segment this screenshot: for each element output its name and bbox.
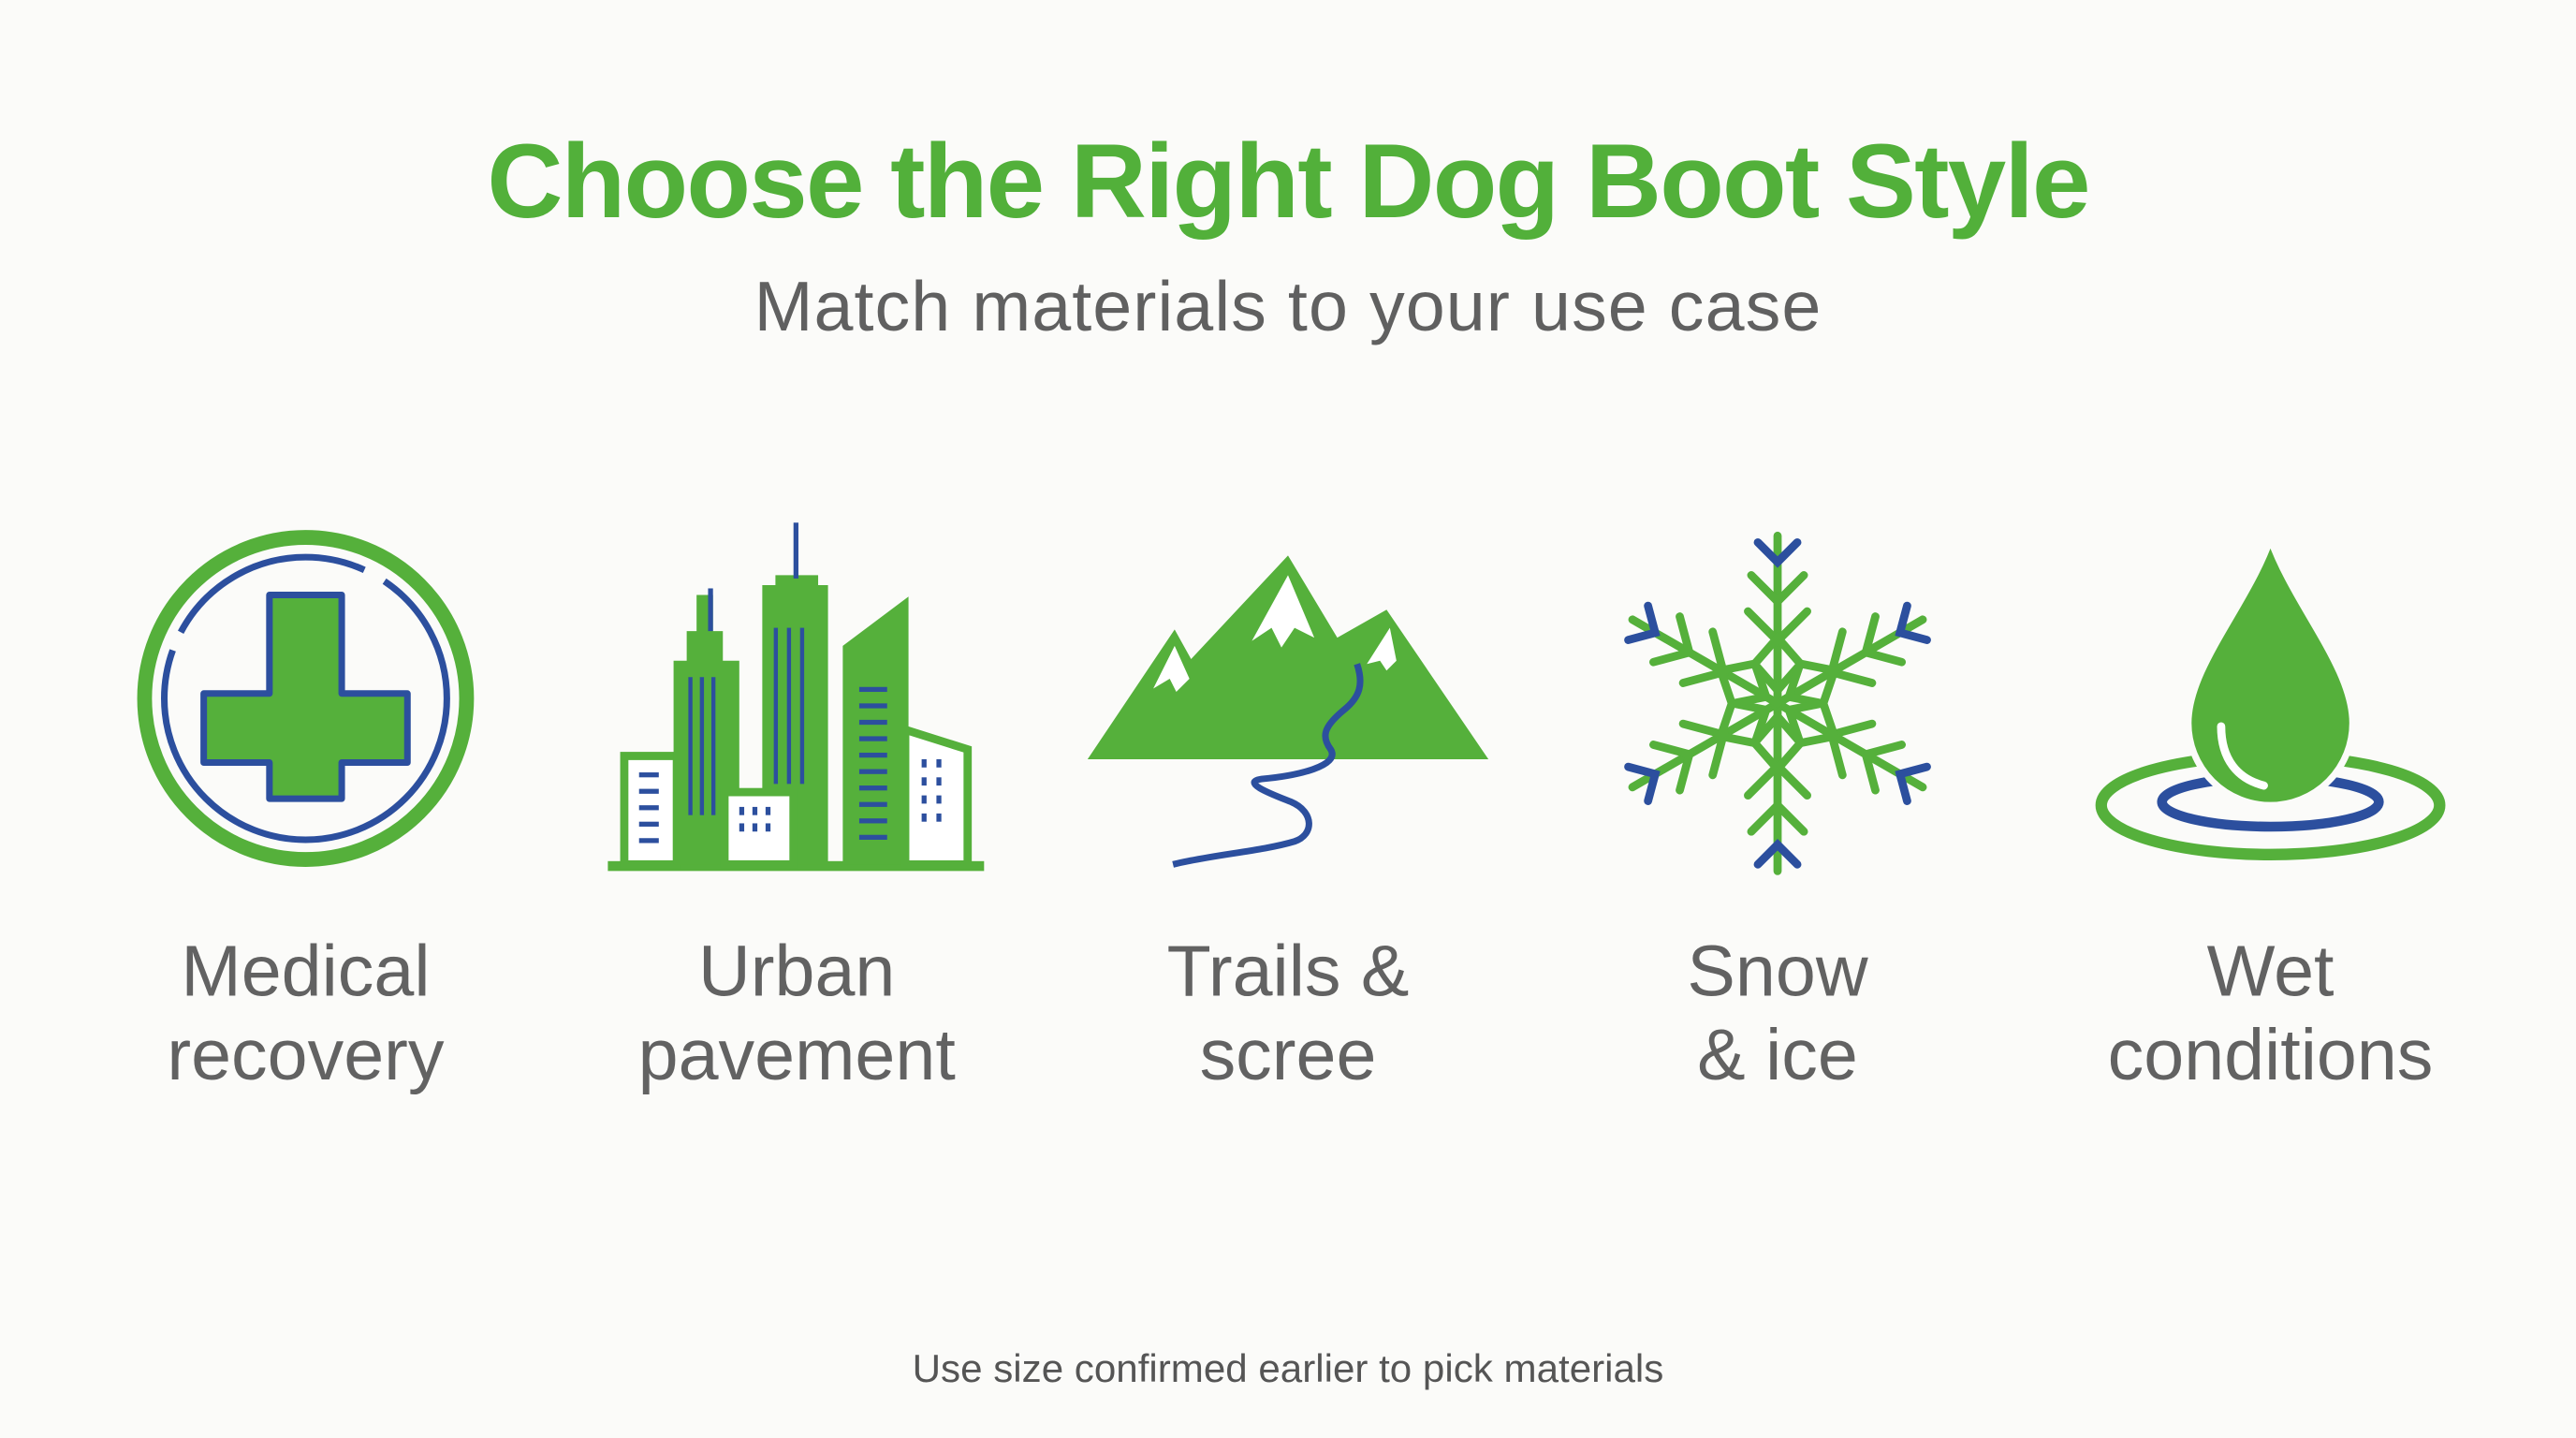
subtitle: Match materials to your use case — [754, 267, 1822, 345]
label: wet conditions: conditions — [2108, 1015, 2433, 1095]
label: urban pavement: pavement — [638, 1015, 956, 1095]
icon: mountains with river — [1088, 555, 1488, 864]
label: trails & scree: Trails & — [1167, 932, 1409, 1012]
footer note: Use size confirmed earlier to pick materials — [913, 1346, 1663, 1390]
icon: snowflake — [1617, 536, 1938, 871]
label: snow & ice: Snow — [1687, 932, 1868, 1012]
icon: medical cross — [144, 537, 466, 859]
title: Choose the Right Dog Boot Style — [487, 122, 2089, 240]
label: medical recovery: recovery — [167, 1015, 445, 1095]
icon: city buildings — [607, 522, 984, 871]
label: trails & scree: scree — [1200, 1015, 1376, 1095]
label: medical recovery: Medical — [181, 932, 430, 1012]
label: urban pavement: Urban — [698, 932, 895, 1012]
label: snow & ice: & ice — [1697, 1015, 1858, 1095]
icon: water drop — [2101, 539, 2439, 855]
label: wet conditions: Wet — [2207, 932, 2334, 1012]
